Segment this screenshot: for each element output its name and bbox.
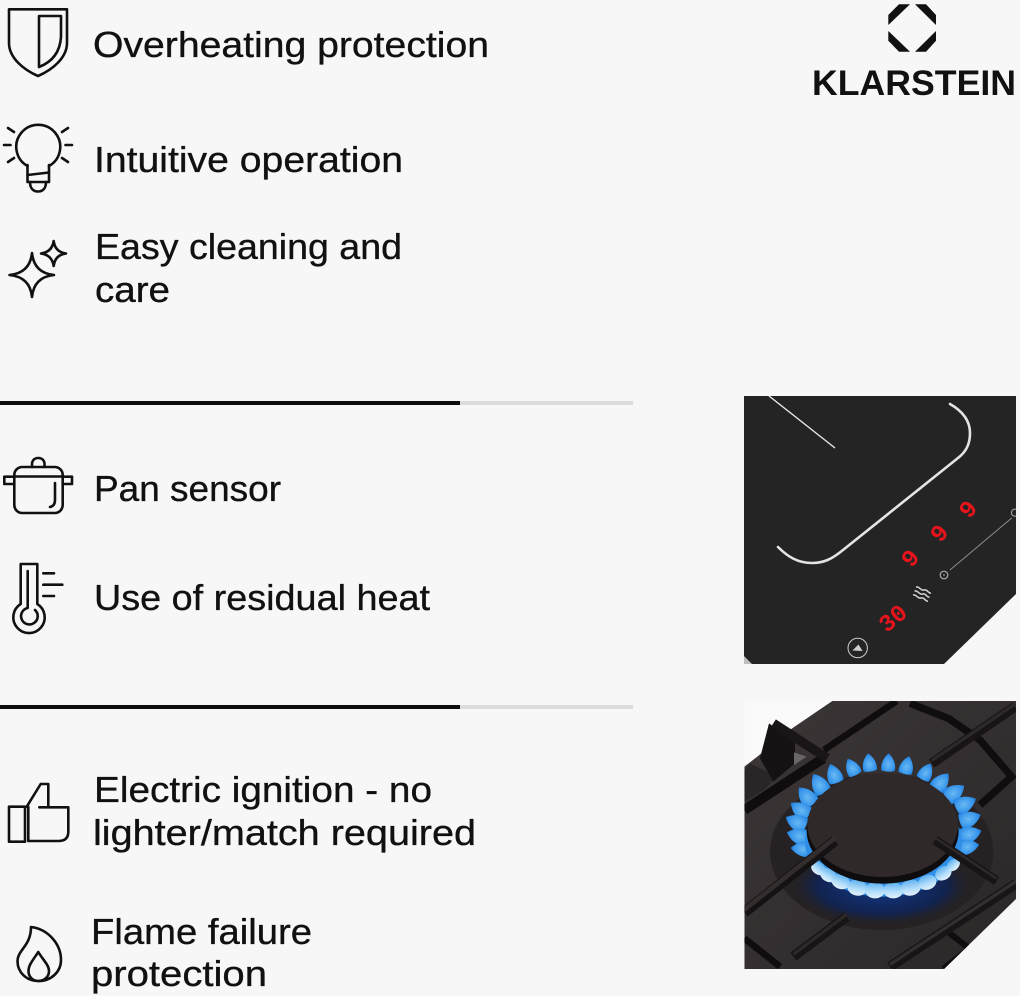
photo: induction hob <box>744 396 1019 664</box>
logo: klarstein <box>812 4 1016 103</box>
heading: flame failure protection: protection <box>91 953 267 994</box>
heading: overheating protection: Overheating protection <box>93 24 489 65</box>
icon: thumbs up <box>9 784 68 842</box>
heading: easy cleaning and care: care <box>95 269 170 310</box>
heading: easy cleaning and care: Easy cleaning and <box>95 226 402 267</box>
divider: gas section <box>0 705 633 709</box>
photo: induction hob: 9 <box>897 545 927 574</box>
heading: use of residual heat: Use of residual heat <box>94 577 430 618</box>
icon: pot <box>4 458 72 513</box>
photo: induction hob: 9 <box>926 520 956 549</box>
logo: klarstein: KLARSTEIN <box>812 64 1016 103</box>
icon: shield <box>9 9 67 76</box>
heading: intuitive operation: Intuitive operation <box>94 139 403 180</box>
heading: easy cleaning and care <box>95 226 402 310</box>
heading: electric ignition: Electric ignition - no <box>94 769 432 810</box>
photo: gas burner <box>744 701 1017 969</box>
icon: flame <box>18 927 61 981</box>
photo: induction hob: 9 <box>955 496 985 525</box>
heading: pan sensor: Pan sensor <box>94 468 281 509</box>
heading: flame failure protection: Flame failure <box>91 911 312 952</box>
heading: electric ignition <box>93 769 476 853</box>
photo: induction hob: 30 <box>875 600 914 640</box>
heading: flame failure protection <box>91 911 312 994</box>
icon: thermometer <box>13 564 62 633</box>
icon: sparkles <box>10 241 66 297</box>
side and top flames <box>782 752 984 857</box>
icon: light bulb <box>4 125 72 192</box>
heading: electric ignition: lighter/match required <box>93 812 476 853</box>
divider: induction section <box>0 401 633 405</box>
